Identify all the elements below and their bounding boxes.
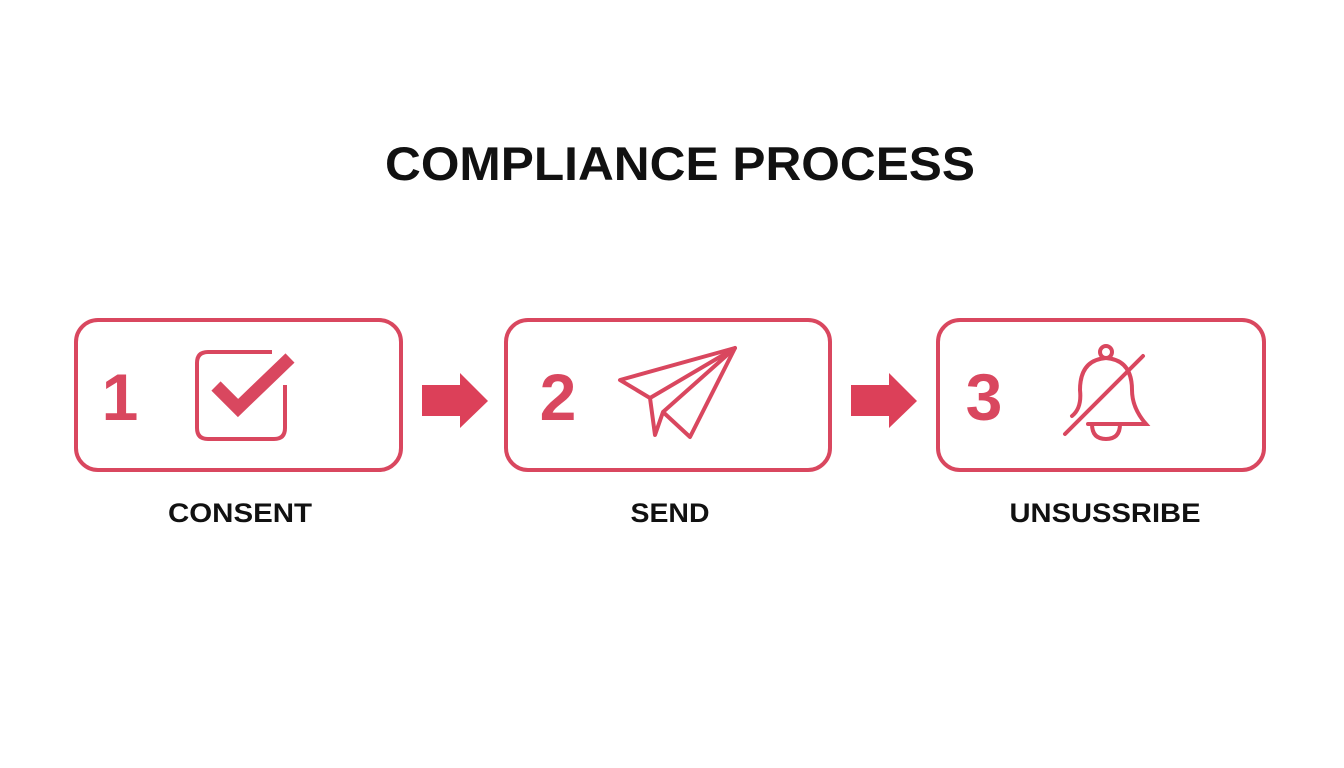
icon: checkbox xyxy=(197,352,290,439)
arrow 2 xyxy=(851,373,917,428)
arrow 1 xyxy=(422,373,488,428)
panel: step 1 consent xyxy=(76,320,401,470)
number 2: 2 xyxy=(540,360,576,434)
panel: step 2 send xyxy=(506,320,830,470)
number 1: 1 xyxy=(102,360,138,434)
title: COMPLIANCE PROCESS xyxy=(385,137,975,190)
number 3: 3 xyxy=(966,360,1002,434)
icon: paper plane xyxy=(620,348,735,437)
panel: step 3 unsubscribe xyxy=(938,320,1264,470)
icon: bell muted xyxy=(1065,346,1146,439)
label: send: SEND xyxy=(630,498,710,528)
label: unsubscribe: UNSUSSRIBE xyxy=(1010,498,1200,528)
label: consent: CONSENT xyxy=(168,498,313,528)
